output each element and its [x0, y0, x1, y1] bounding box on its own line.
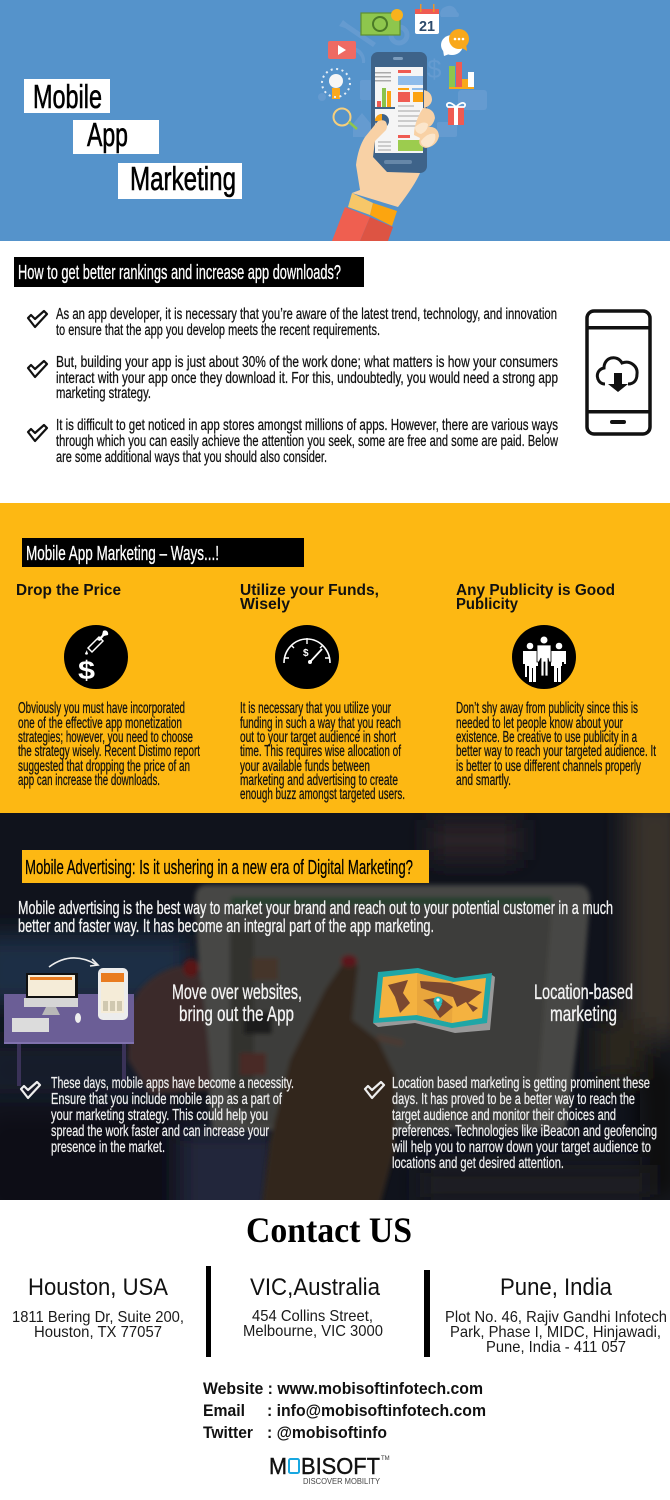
text block: apps necessity: [21, 1075, 294, 1156]
contact: India: [445, 1274, 667, 1356]
column: utilize funds: your available funds between: [240, 758, 370, 775]
column: drop the price: Obviously you must have incorporated: [18, 700, 185, 717]
heading: mobile advertising: Mobile Advertising: Is it ushering in a new era of Digital Marketing?: [25, 857, 413, 879]
icon: calendar: [415, 4, 439, 35]
icon: bar chart: [449, 62, 474, 89]
icon: dropper and dollar: [64, 625, 128, 689]
column: utilize funds: Utilize your Funds,: [240, 582, 379, 599]
heading: rankings: [14, 257, 364, 287]
subheading: move over websites: bring out the App: [179, 1003, 294, 1026]
column: utilize funds: funding in such a way that you reach: [240, 715, 401, 732]
column: utilize funds: time. This requires wise allocation of: [240, 743, 401, 760]
column: utilize funds: It is necessary that you utilize your: [240, 700, 391, 717]
column: publicity: Publicity: [456, 596, 518, 613]
illustration: map with pin: [373, 968, 495, 1033]
heading: rankings: How to get better rankings and increase app downloads?: [18, 262, 341, 284]
text block: website, email, twitter: Email: [203, 1402, 245, 1420]
column: drop the price: strategies; however, you need to choose: [18, 729, 193, 746]
column: drop the price: one of the effective app monetization: [18, 715, 182, 732]
text block: apps necessity: Ensure that you include mobile app as a part of: [51, 1091, 282, 1108]
column: utilize funds: enough buzz amongst targeted users.: [240, 786, 405, 803]
icon: money: [361, 9, 403, 35]
column: drop the price: suggested that dropping the price of an: [18, 758, 190, 775]
column: drop the price: Drop the Price: [16, 582, 121, 599]
contact: India: Pune, India: [500, 1274, 613, 1301]
icon: video play: [328, 41, 356, 59]
column: drop the price: the strategy wisely. Recent Distimo report: [18, 743, 200, 760]
contact: India: Pune, India - 411 057: [486, 1339, 626, 1356]
icon: people: [512, 625, 576, 689]
column: utilize funds: out to your target audience in short: [240, 729, 396, 746]
text block: bullet 3: [28, 417, 559, 466]
panel: hero banner: [0, 0, 670, 241]
illustration: desktop to phone: [4, 958, 134, 1086]
logo: Mobisoft: M: [269, 1453, 287, 1479]
column: drop the price: [16, 582, 200, 789]
column: drop the price: app can increase the downloads.: [18, 772, 160, 789]
contact: Houston: Houston, TX 77057: [34, 1324, 162, 1341]
contact: Australia: Melbourne, VIC 3000: [243, 1323, 383, 1340]
panel: mobile advertising with dimmed photo background: [0, 800, 670, 1220]
icon: dropper and dollar: $: [78, 655, 96, 685]
logo: Mobisoft: TM: [381, 1456, 390, 1462]
contact: Houston: Houston, USA: [28, 1274, 168, 1301]
text block: location marketing: locations and get desired attention.: [392, 1155, 564, 1172]
logo: Mobisoft: [269, 1453, 390, 1486]
column: utilize funds: marketing and advertising to create: [240, 772, 398, 789]
text block: website, email, twitter: Website : www.mobisoftinfotech.com: [203, 1380, 483, 1398]
text block: bullet 3: are some additional ways that you should also consider.: [56, 449, 327, 466]
icon: magnifier: [334, 108, 357, 129]
icon: speedometer: [275, 625, 339, 689]
title: Mobile App Marketing: Mobile: [33, 78, 102, 115]
contact: Australia: 454 Collins Street,: [252, 1308, 373, 1325]
subheading: move over websites: Move over websites,: [172, 981, 302, 1004]
text block: intro: [18, 897, 613, 936]
column: publicity: Any Publicity is Good: [456, 582, 615, 599]
illustration: hand holding phone with app icons: $: [427, 54, 442, 84]
logo: Mobisoft: DISCOVER MOBILITY: [303, 1477, 381, 1486]
text block: website, email, twitter: : info@mobisoftinfotech.com: [267, 1402, 486, 1420]
contact: Australia: VIC,Australia: [250, 1274, 381, 1301]
text block: bullet 1: to ensure that the app you develop meets the recent requirements.: [56, 322, 380, 339]
text block: apps necessity: presence in the market.: [51, 1139, 165, 1156]
text block: intro: better and faster way. It has become an integral part of the app marketing.: [18, 915, 434, 936]
text block: website, email, twitter: : @mobisoftinfo: [267, 1424, 387, 1442]
subheading: move over websites: [172, 981, 302, 1026]
text block: apps necessity: These days, mobile apps have become a necessity.: [51, 1075, 294, 1092]
heading: contact us: Contact US: [246, 1210, 412, 1250]
column: publicity: [456, 582, 656, 789]
text block: bullet 1: [28, 306, 557, 339]
contact: Houston: 1811 Bering Dr, Suite 200,: [12, 1309, 184, 1326]
subheading: location-based marketing: [534, 981, 633, 1026]
text block: website, email, twitter: Twitter: [203, 1424, 254, 1442]
column: utilize funds: [240, 582, 405, 803]
title: Mobile App Marketing: Marketing: [130, 160, 236, 197]
text block: location marketing: [365, 1075, 657, 1172]
title: Mobile App Marketing: App: [87, 116, 128, 153]
icon: gift: [447, 103, 465, 125]
title: Mobile App Marketing: [24, 78, 242, 199]
heading: mobile advertising: [22, 850, 429, 883]
divider: [206, 1266, 211, 1357]
column: publicity: and smartly.: [456, 772, 511, 789]
text block: bullet 2: marketing strategy.: [56, 385, 151, 402]
contact: Australia: [243, 1274, 383, 1340]
icon: speedometer: $: [303, 648, 309, 659]
icon: calendar: 21: [419, 18, 435, 35]
logo: Mobisoft: BISOFT: [301, 1453, 380, 1479]
icon: phone with cloud download: [587, 311, 650, 434]
text block: apps necessity: spread the work faster and can increase your: [51, 1123, 269, 1140]
divider: [424, 1270, 430, 1357]
heading: ways: Mobile App Marketing – Ways...!: [26, 543, 219, 565]
panel: ways: [0, 503, 670, 813]
text block: apps necessity: your marketing strategy. This could help you: [51, 1107, 268, 1124]
subheading: location-based marketing: marketing: [550, 1003, 617, 1026]
text block: bullet 2: [28, 354, 558, 402]
icon: chat bubbles: [441, 29, 469, 56]
icon: light bulb: [322, 69, 350, 99]
column: utilize funds: Wisely: [240, 596, 290, 613]
contact: Houston: [12, 1274, 184, 1341]
illustration: hand holding phone with app icons: [318, 4, 487, 241]
text block: website, email, twitter: [203, 1380, 486, 1442]
